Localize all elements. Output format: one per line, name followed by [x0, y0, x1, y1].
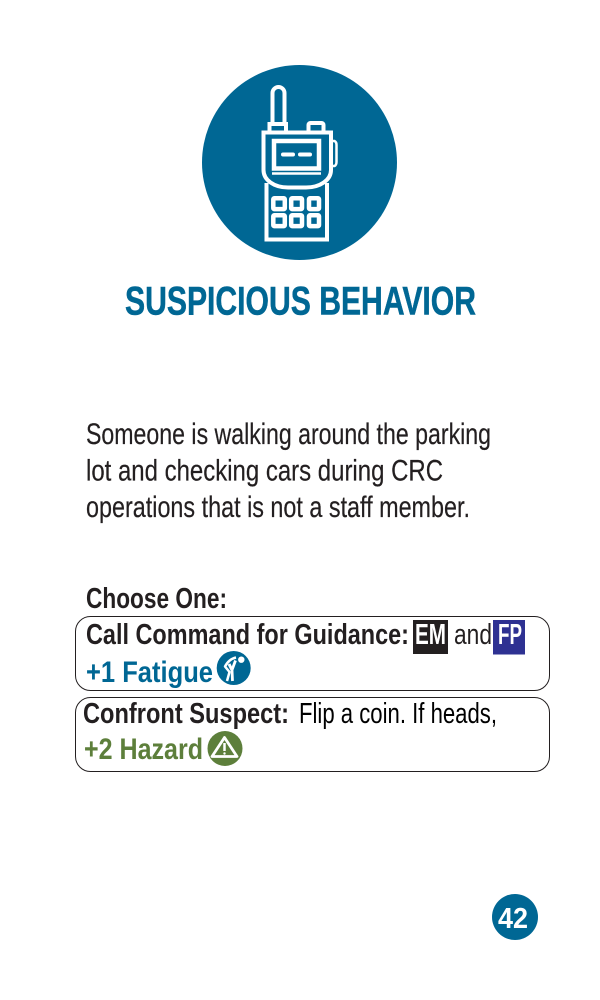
fatigue penalty: +1 Fatigue: [86, 656, 213, 689]
option 1 action: Call Command for Guidance:: [86, 619, 409, 651]
tag: FP: [493, 619, 525, 654]
title: SUSPICIOUS BEHAVIOR: [125, 280, 476, 324]
icon: fatigue person: [217, 651, 251, 685]
hazard penalty: +2 Hazard: [84, 733, 203, 766]
scenario text: [86, 418, 491, 524]
coin flip text: Flip a coin. If heads,: [299, 698, 497, 730]
panel: option 1 call command: [76, 616, 550, 690]
keypad buttons: [273, 198, 319, 226]
choose one heading: Choose One:: [86, 583, 227, 615]
panel: option 2 confront suspect: [76, 698, 550, 772]
scenario text: operations that is not a staff member.: [86, 491, 470, 524]
scenario text: lot and checking cars during CRC: [86, 454, 443, 488]
option 2 action: Confront Suspect:: [83, 698, 289, 730]
icon: hazard triangle: [208, 731, 242, 766]
scenario text: Someone is walking around the parking: [86, 418, 491, 451]
tag: FP: FP: [498, 619, 522, 651]
page number badge: 42: [498, 903, 528, 935]
tag: EM: [413, 619, 448, 654]
page number badge: [492, 894, 538, 940]
tag: EM: EM: [415, 619, 446, 651]
and: and: [454, 619, 492, 651]
icon: radio in blue circle: [202, 65, 397, 260]
